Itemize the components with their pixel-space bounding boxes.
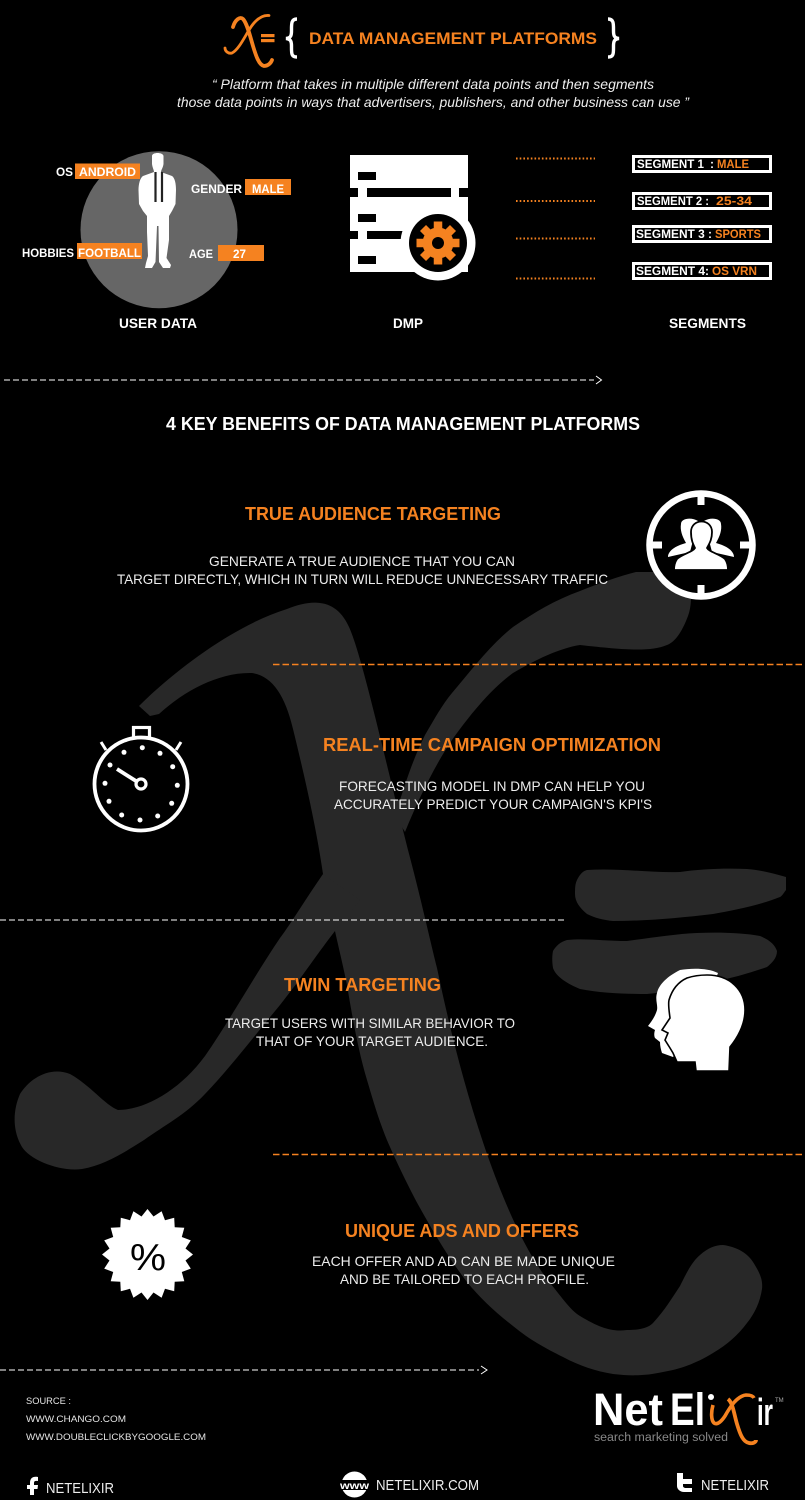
definition quote xyxy=(177,76,690,110)
segment 3 xyxy=(634,226,770,242)
description: TARGET USERS WITH SIMILAR BEHAVIOR TO xyxy=(225,1015,515,1031)
label: age: 27 xyxy=(233,247,246,261)
segment 1: SEGMENT 1 xyxy=(637,157,704,171)
segment 2 xyxy=(634,194,770,208)
left brace xyxy=(286,19,297,57)
NetElixir logo: Net xyxy=(593,1384,663,1435)
section heading: 4 KEY BENEFITS OF DATA MANAGEMENT PLATFORMS xyxy=(166,414,640,434)
icon: percent starburst xyxy=(102,1209,193,1300)
footer: website xyxy=(339,1472,479,1498)
segment 4 xyxy=(634,264,770,278)
sources xyxy=(26,1396,206,1443)
heading: TRUE AUDIENCE TARGETING xyxy=(245,504,501,524)
footer: facebook: NETELIXIR xyxy=(46,1480,114,1497)
sources: WWW.DOUBLECLICKBYGOOGLE.COM xyxy=(26,1432,206,1443)
benefit 2: real-time campaign optimization xyxy=(94,728,661,830)
label: OS xyxy=(56,164,140,179)
footer: website: www xyxy=(339,1480,370,1492)
heading: TWIN TARGETING xyxy=(284,975,441,995)
benefit 3: twin targeting xyxy=(225,969,745,1071)
description xyxy=(334,778,652,812)
panel: segments xyxy=(634,156,770,278)
label: age: AGE xyxy=(189,247,213,261)
icon: businessman silhouette xyxy=(138,153,176,268)
arrow: divider to footer xyxy=(0,1366,487,1374)
heading: UNIQUE ADS AND OFFERS xyxy=(345,1221,579,1241)
icon: percent starburst: % xyxy=(130,1237,166,1279)
label: hobbies: FOOTBALL xyxy=(78,246,141,260)
description: THAT OF YOUR TARGET AUDIENCE. xyxy=(256,1033,488,1049)
header logo: orange chi equals xyxy=(225,15,274,66)
label: hobbies xyxy=(22,243,142,260)
title: DATA MANAGEMENT PLATFORMS xyxy=(309,29,597,48)
label: OS: ANDROID xyxy=(79,165,136,179)
footer: twitter: NETELIXIR xyxy=(701,1477,769,1494)
description: TARGET DIRECTLY, WHICH IN TURN WILL REDUCE UNNECESSARY TRAFFIC xyxy=(117,571,608,587)
label: gender: MALE xyxy=(252,182,284,196)
NetElixir logo: El xyxy=(670,1384,705,1435)
description xyxy=(117,553,608,587)
segment 3: SPORTS xyxy=(715,227,761,241)
grey circle xyxy=(80,151,238,308)
label: gender xyxy=(191,179,291,196)
heading: REAL-TIME CAMPAIGN OPTIMIZATION xyxy=(323,735,661,755)
definition quote: “ Platform that takes in multiple different data points and then segments xyxy=(212,76,654,92)
segment 2: 25-34 xyxy=(716,194,752,208)
watermark: large chi and equals symbol xyxy=(15,572,786,1375)
label: OS: OS xyxy=(56,165,73,179)
description: EACH OFFER AND AD CAN BE MADE UNIQUE xyxy=(312,1253,615,1269)
description xyxy=(312,1253,615,1287)
dotted connectors xyxy=(516,158,595,278)
divider: white dashes xyxy=(0,919,567,921)
footer: twitter xyxy=(677,1473,769,1494)
sources: SOURCE : xyxy=(26,1396,71,1407)
label: age xyxy=(189,245,264,261)
description: ACCURATELY PREDICT YOUR CAMPAIGN'S KPI'S xyxy=(334,796,652,812)
description: GENERATE A TRUE AUDIENCE THAT YOU CAN xyxy=(209,553,515,569)
label: hobbies: HOBBIES xyxy=(22,246,74,260)
NetElixir logo xyxy=(593,1384,784,1444)
icon: DMP server with gear xyxy=(349,155,476,280)
segment 3: SEGMENT 3 : xyxy=(636,227,712,241)
sources: WWW.CHANGO.COM xyxy=(26,1414,126,1425)
NetElixir logo: ir xyxy=(757,1392,773,1434)
segment 2: SEGMENT 2 : xyxy=(637,194,709,208)
caption: user data: USER DATA xyxy=(119,315,197,331)
caption: segments: SEGMENTS xyxy=(669,315,746,331)
right brace xyxy=(608,19,619,57)
divider: orange dashes xyxy=(273,1154,805,1156)
segment 1 xyxy=(634,156,770,172)
segment 4: OS VRN xyxy=(712,264,757,278)
panel: user data xyxy=(22,151,291,308)
benefit 1: true audience targeting xyxy=(117,494,752,596)
icon: twin heads xyxy=(648,969,745,1071)
arrow: divider to benefits xyxy=(4,376,602,384)
definition quote: those data points in ways that advertisers, publishers, and other business can use ” xyxy=(177,94,690,110)
description: AND BE TAILORED TO EACH PROFILE. xyxy=(340,1271,589,1287)
label: gender: GENDER xyxy=(191,182,242,196)
NetElixir logo: search marketing solved xyxy=(594,1432,728,1444)
description xyxy=(225,1015,515,1049)
segment 1: MALE xyxy=(717,157,749,171)
description: FORECASTING MODEL IN DMP CAN HELP YOU xyxy=(339,778,645,794)
segment 1: : xyxy=(710,157,714,171)
icon: stopwatch xyxy=(94,728,188,830)
segment 4: SEGMENT 4: xyxy=(636,264,709,278)
footer: facebook xyxy=(27,1477,114,1497)
divider: orange dashes xyxy=(273,664,805,666)
footer: website: NETELIXIR.COM xyxy=(376,1477,479,1494)
NetElixir logo: TM xyxy=(775,1398,784,1404)
benefit 4: unique ads and offers xyxy=(102,1209,615,1300)
icon: audience target xyxy=(650,494,752,596)
caption: DMP: DMP xyxy=(393,315,423,331)
